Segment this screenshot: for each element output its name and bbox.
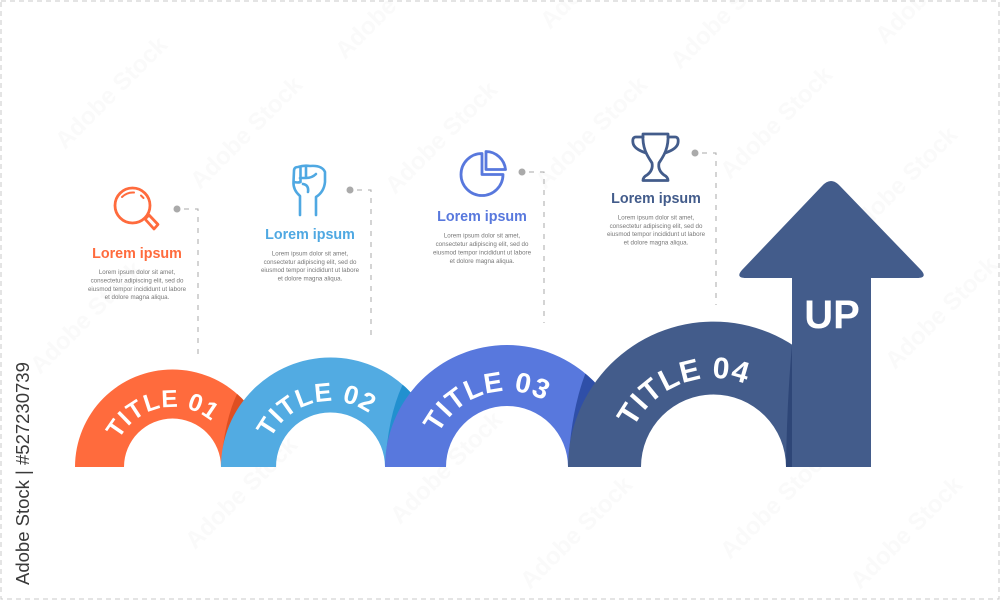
- text block 02: eiusmod tempor incididunt ut labore: [261, 267, 360, 274]
- text block 02: et dolore magna aliqua.: [278, 276, 343, 282]
- text block 04: Lorem ipsum dolor sit amet,: [618, 214, 694, 221]
- icon: magnifying glass: [115, 188, 158, 229]
- arch 01: [75, 370, 270, 467]
- icon: trophy: [633, 134, 678, 180]
- connector 03: [518, 168, 544, 323]
- text block 04: consectetur adipiscing elit, sed do: [610, 223, 703, 230]
- icon: pie chart: [461, 152, 506, 196]
- watermark pattern: Adobe Stock: [530, 71, 653, 194]
- arrow: up: [739, 181, 924, 467]
- text block 02: Lorem ipsum dolor sit amet,: [272, 250, 348, 258]
- arch label 01: TITLE 01: [104, 390, 217, 435]
- watermark pattern: Adobe Stock: [715, 61, 838, 184]
- heading 01: Lorem ipsum: [92, 246, 182, 262]
- icon: raised fist: [293, 166, 325, 215]
- arch label 03: TITLE 03: [422, 372, 550, 428]
- arch label 04: TITLE 04: [616, 357, 749, 422]
- text block 03: eiusmod tempor incididunt ut labore: [433, 250, 532, 256]
- text block 03: et dolore magna aliqua.: [450, 258, 515, 265]
- step 01 callout: [88, 188, 198, 360]
- text block 02: [261, 250, 360, 282]
- text block 01: consectetur adipiscing elit, sed do: [91, 278, 184, 284]
- arch 03: [385, 345, 595, 467]
- connector 04: [692, 150, 716, 305]
- arrow label: UP: [804, 293, 860, 337]
- heading 04: Lorem ipsum: [611, 191, 701, 207]
- text block 01: eiusmod tempor incididunt ut labore: [88, 286, 187, 293]
- watermark pattern: Adobe Stock: [180, 431, 303, 554]
- watermark pattern: Adobe Stock: [845, 471, 968, 594]
- text block 01: [88, 269, 187, 301]
- watermark pattern: Adobe Stock: [385, 406, 508, 529]
- heading 02: Lorem ipsum: [265, 227, 355, 243]
- watermark pattern: Adobe Stock: [380, 76, 503, 199]
- text block 01: et dolore magna aliqua.: [105, 294, 170, 301]
- watermark pattern: Adobe Stock: [185, 71, 308, 194]
- text block 04: eiusmod tempor incididunt ut labore: [607, 231, 706, 238]
- step 02 callout: [261, 166, 371, 341]
- text block 04: et dolore magna aliqua.: [624, 240, 689, 246]
- watermark pattern: Adobe Stock: [715, 441, 838, 564]
- text block 01: Lorem ipsum dolor sit amet,: [99, 269, 175, 276]
- watermark pattern: Adobe Stock: [50, 31, 173, 154]
- watermark pattern: Adobe Stock: [880, 251, 1000, 374]
- step 03 callout: [433, 152, 544, 323]
- step 04 callout: [607, 134, 716, 305]
- text block 04: [607, 214, 706, 246]
- connector 01: [174, 206, 198, 360]
- text block 03: Lorem ipsum dolor sit amet,: [444, 232, 520, 240]
- text block 03: consectetur adipiscing elit, sed do: [436, 241, 529, 248]
- arch 04: [568, 322, 792, 467]
- stock credit label: Adobe Stock | #527230739: [12, 362, 33, 585]
- watermark pattern: Adobe Stock: [840, 121, 963, 244]
- watermark pattern: Adobe Stock: [515, 471, 638, 594]
- text block 03: [433, 232, 532, 265]
- arch label 02: TITLE 02: [256, 382, 376, 434]
- heading 03: Lorem ipsum: [437, 209, 527, 225]
- arch 02: [221, 358, 410, 467]
- text block 02: consectetur adipiscing elit, sed do: [264, 259, 357, 266]
- watermark pattern: Adobe Stock: [25, 256, 148, 379]
- connector 02: [346, 186, 371, 341]
